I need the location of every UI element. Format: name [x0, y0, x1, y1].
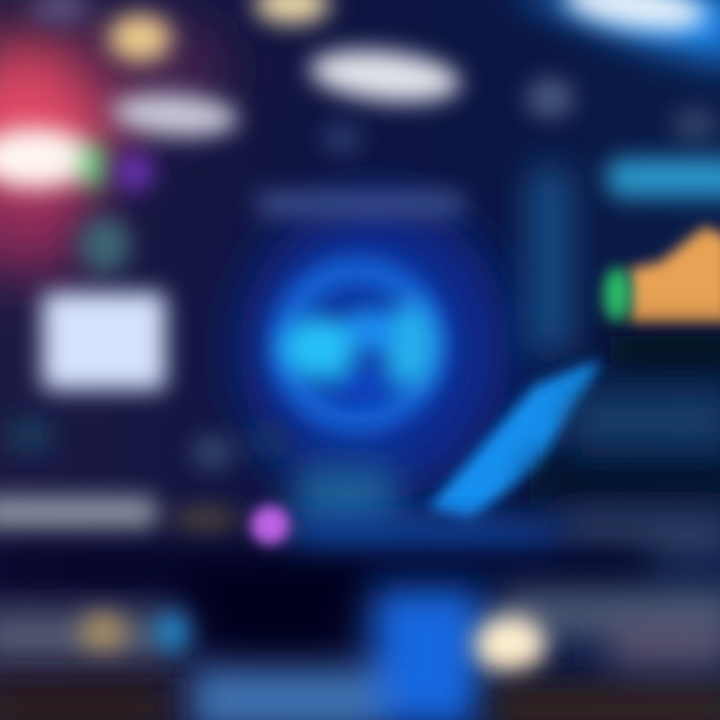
- blue diagonal stripe: [428, 358, 604, 520]
- lower blue plate: [290, 520, 560, 560]
- red glow panel: [0, 5, 230, 275]
- orange area chart: [630, 226, 720, 324]
- teal lower block: [295, 465, 395, 525]
- warm light left: [79, 612, 127, 652]
- bright swirl centre: [280, 301, 436, 401]
- top right blue panel: [505, 0, 720, 65]
- dark right bands: [530, 335, 720, 550]
- white label left: [110, 90, 240, 140]
- central blue glow: [240, 200, 510, 500]
- teal bar right: [606, 158, 720, 198]
- white and green light: [0, 128, 107, 189]
- right grey lower band: [500, 590, 720, 638]
- bottom blue column: [190, 590, 480, 720]
- top right white highlight: [561, 0, 709, 38]
- small grey marks: [10, 78, 717, 468]
- green chart marker: [603, 267, 631, 323]
- yellow lights top: [30, 0, 330, 62]
- bright cyan spot: [155, 612, 189, 652]
- white label top centre: [307, 43, 463, 109]
- purple dot: [116, 153, 154, 191]
- outer ring: [284, 271, 432, 419]
- brown smudge: [171, 506, 239, 534]
- dark horizontal band: [0, 550, 650, 660]
- warm white light right: [474, 615, 546, 675]
- vertical blue column: [528, 165, 572, 355]
- lavender panel: [42, 292, 166, 390]
- purple light: [250, 505, 290, 545]
- grey band left: [0, 496, 158, 530]
- bottom brown left: [0, 678, 170, 720]
- blue swirl circle: [280, 271, 436, 419]
- bottom brown right: [490, 632, 720, 720]
- grey lower left band: [0, 615, 170, 659]
